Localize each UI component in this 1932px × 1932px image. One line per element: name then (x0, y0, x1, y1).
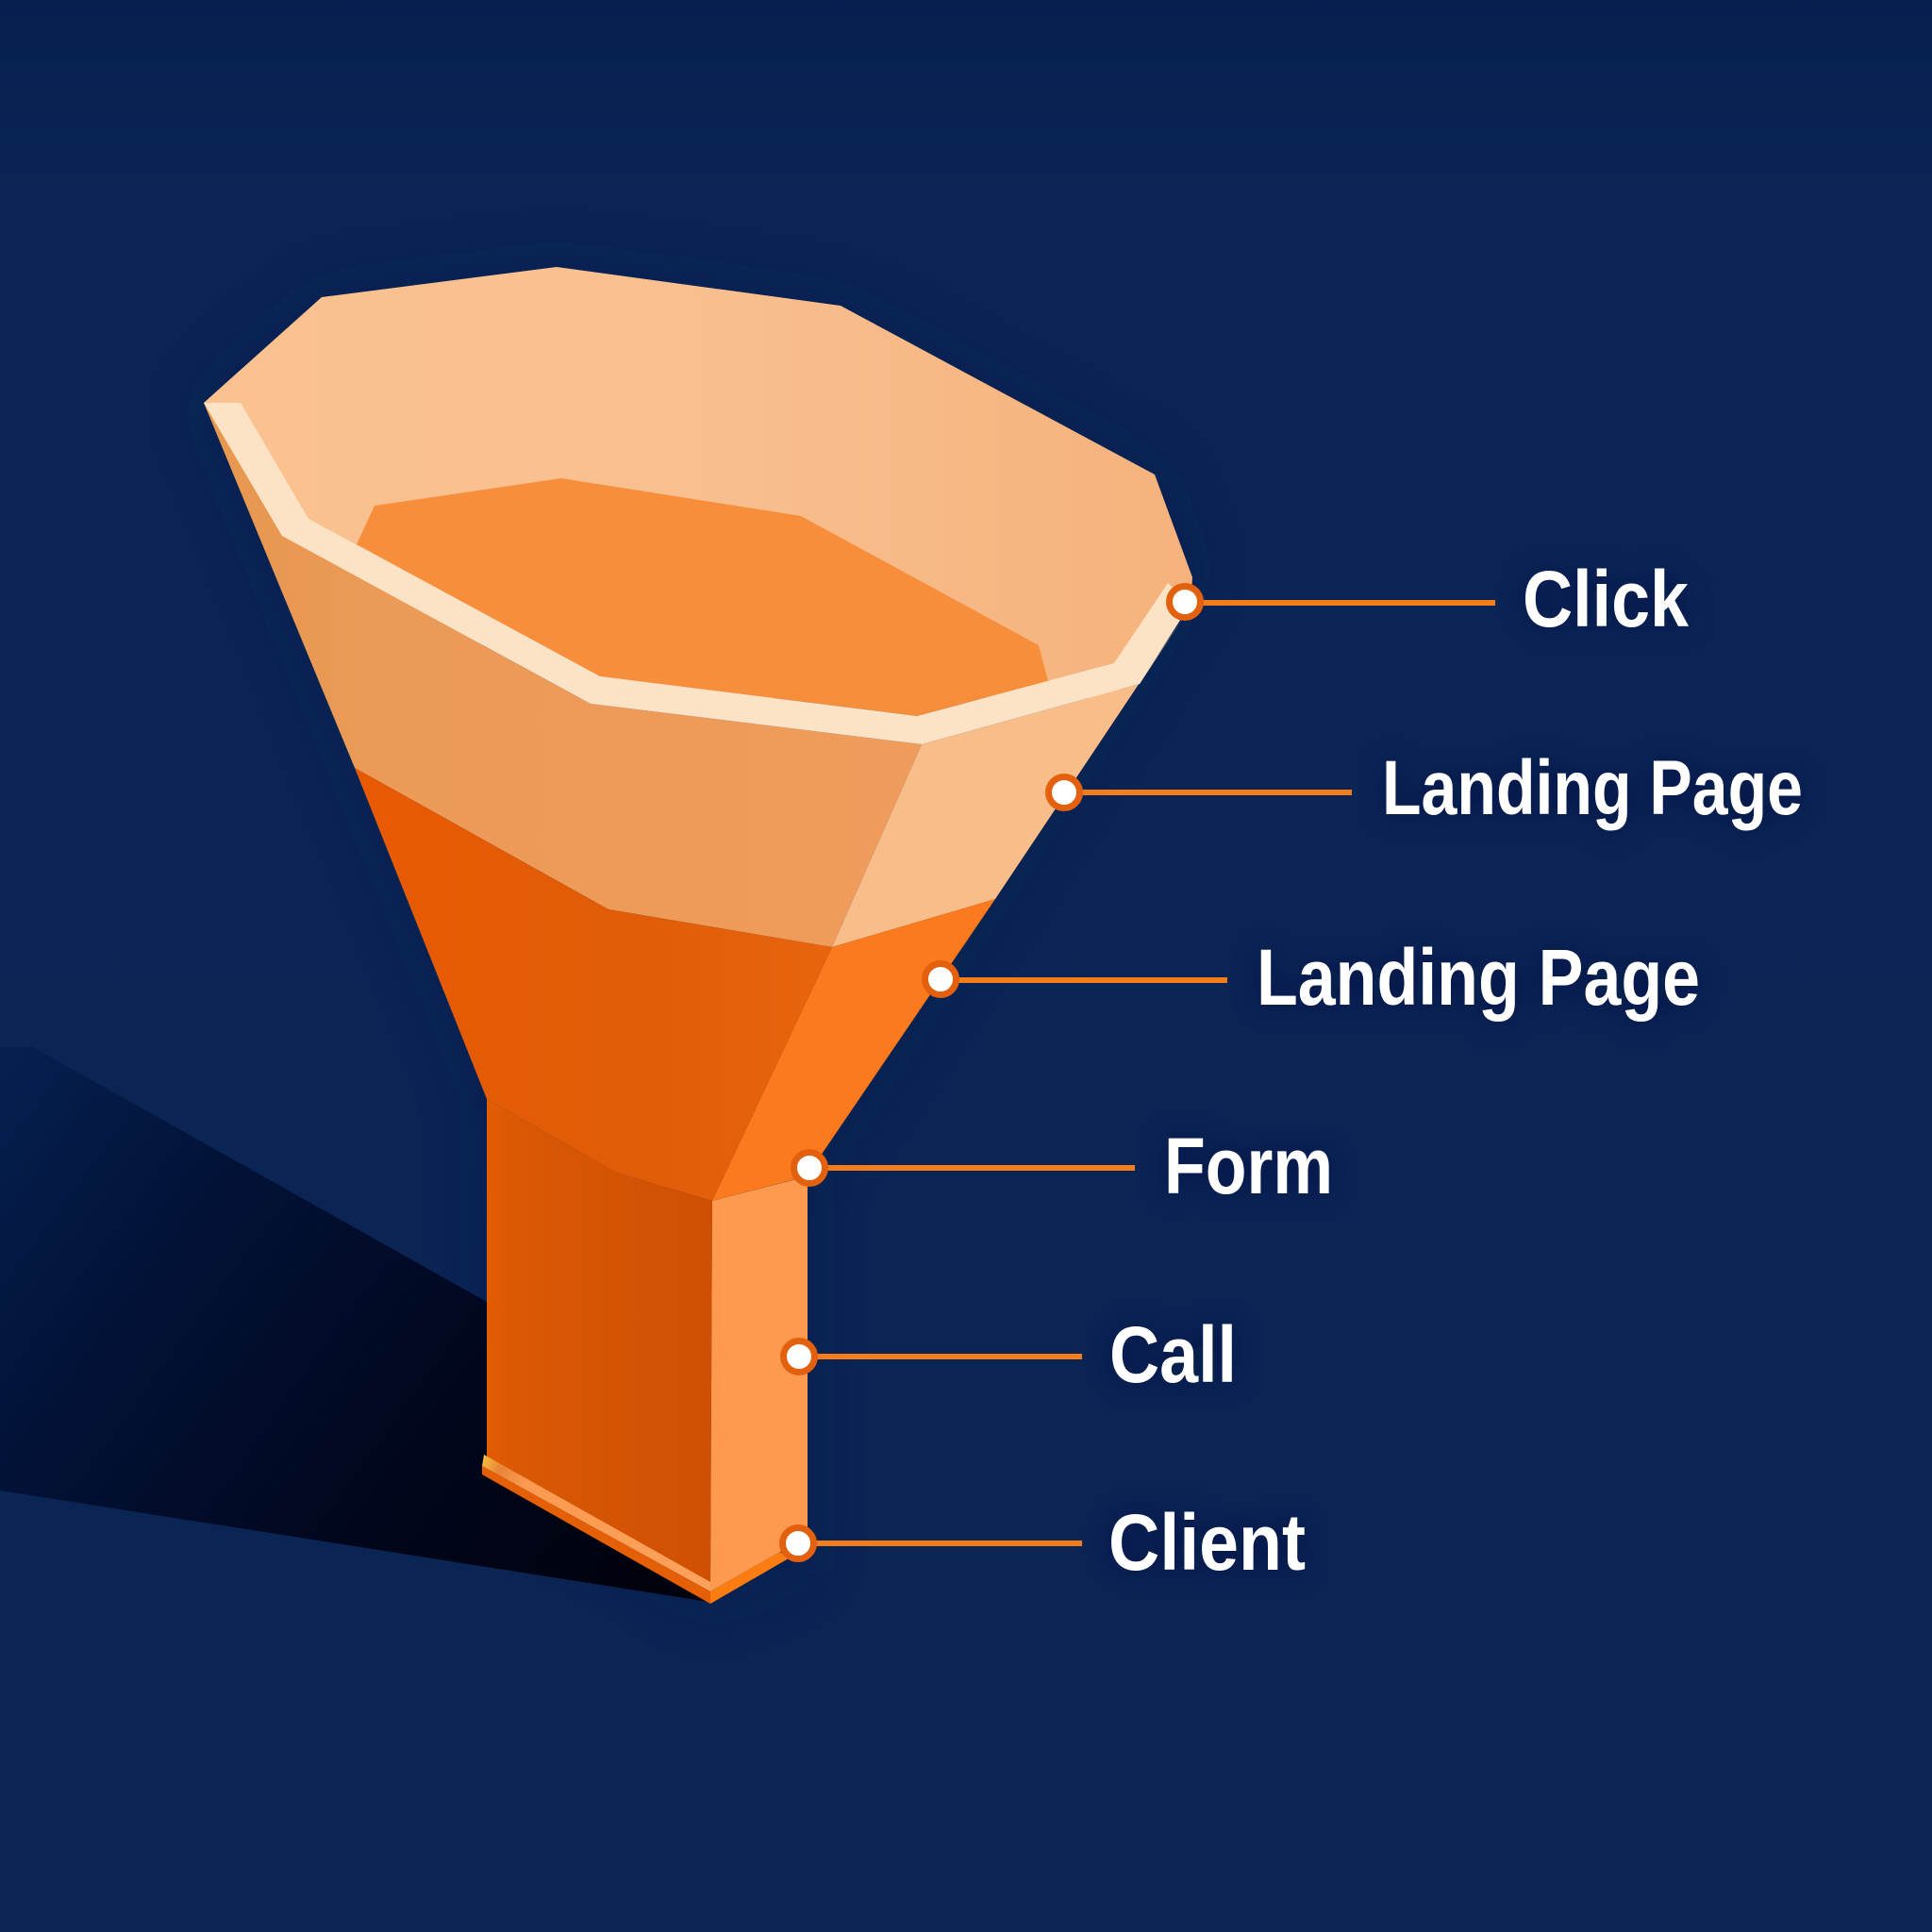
funnel dark glow (204, 267, 1191, 1604)
cast shadow (0, 1047, 708, 1602)
callout: Landing Page 1 (1049, 745, 1803, 831)
callout: Landing Page 2 (924, 933, 1700, 1022)
middle band left face (355, 768, 832, 1201)
rim (204, 403, 1191, 744)
callout: Click (1170, 555, 1689, 643)
callout: Form: Form (1164, 1122, 1333, 1210)
callout: Form (794, 1122, 1333, 1210)
callout: Call: Call (1109, 1310, 1237, 1399)
callout: Client: Client (1108, 1498, 1306, 1587)
upper band right face (832, 609, 1189, 947)
funnel inner wall (204, 267, 1192, 698)
stem right face (710, 1176, 808, 1591)
callout: Client: Client (1108, 1498, 1306, 1587)
stem left face (487, 1099, 712, 1585)
funnel (204, 267, 1192, 1604)
callout: Call: Call (1109, 1310, 1237, 1399)
callout: Client (783, 1498, 1306, 1587)
callout: Click: Click (1523, 555, 1689, 643)
base plate (482, 1455, 789, 1604)
callout: Click: Click (1523, 555, 1689, 643)
callout: Form: Form (1164, 1122, 1333, 1210)
callout: Landing Page 2: Landing Page (1257, 933, 1700, 1022)
upper band left face (204, 403, 922, 947)
callout: Landing Page 2: Landing Page (1257, 933, 1700, 1022)
funnel inner floor (357, 478, 1048, 716)
middle band right face (712, 899, 995, 1201)
callout: Call (783, 1310, 1237, 1399)
callout: Landing Page 1: Landing Page (1382, 745, 1803, 831)
callout: Landing Page 1: Landing Page (1382, 745, 1803, 831)
